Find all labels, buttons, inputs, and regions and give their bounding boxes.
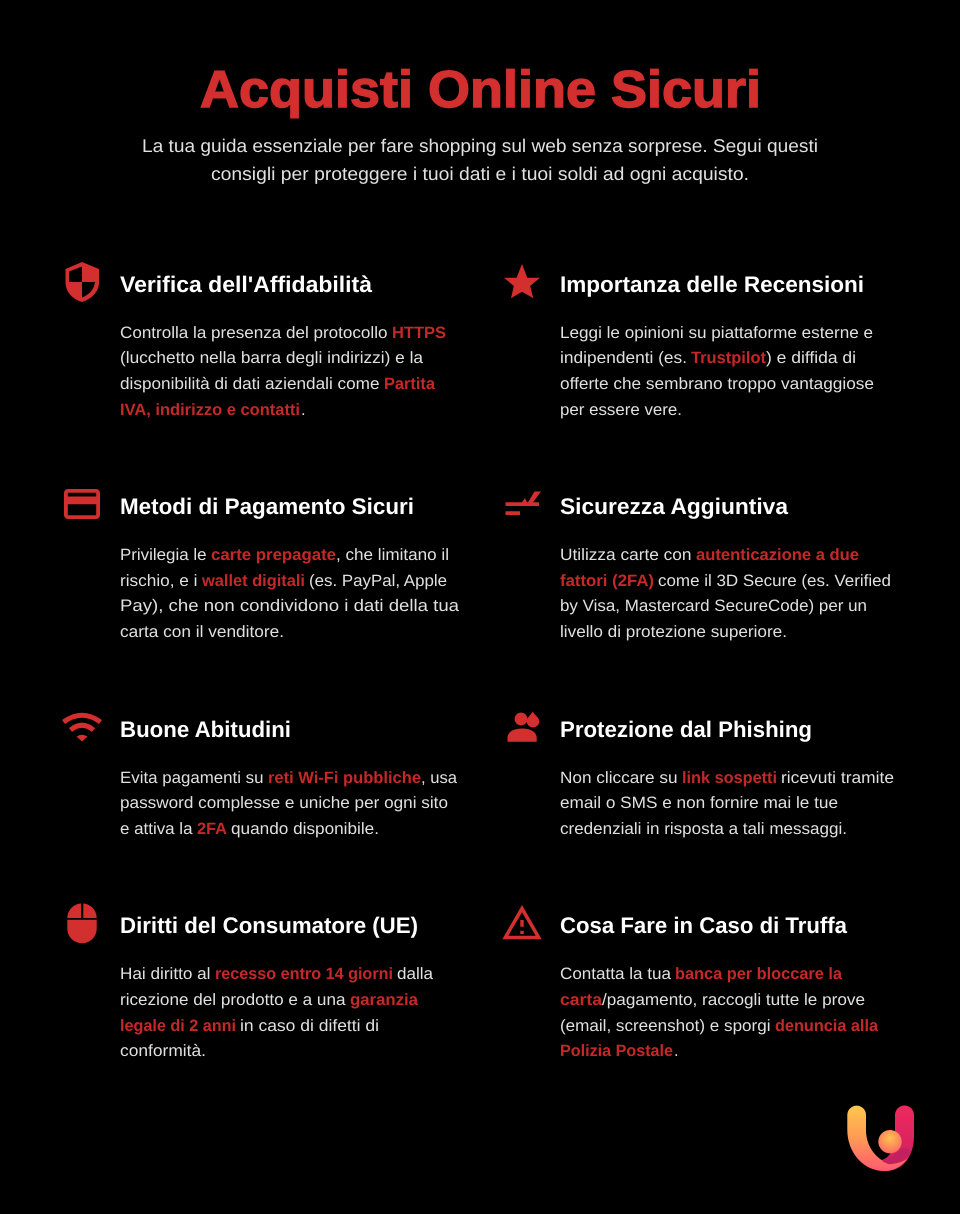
text block: credenziali in risposta a tali messaggi. xyxy=(560,820,847,838)
text block: /pagamento, raccogli tutte le prove xyxy=(602,991,865,1009)
text block: link sospetti xyxy=(682,769,777,787)
heading: Cosa Fare in Caso di Truffa xyxy=(560,913,847,938)
panel: sicurezza aggiuntiva xyxy=(506,492,891,641)
text block: ricevuti tramite xyxy=(781,769,894,787)
icon: star xyxy=(504,264,540,298)
text block: come il 3D Secure (es. Verified xyxy=(658,572,891,590)
text block: fattori (2FA) xyxy=(560,572,654,590)
text block: Leggi le opinioni su piattaforme esterne e xyxy=(560,324,873,342)
text block: Utilizza carte con xyxy=(560,546,692,564)
heading: Protezione dal Phishing xyxy=(560,717,812,742)
title: Acquisti Online Sicuri xyxy=(200,61,761,119)
text block: Polizia Postale xyxy=(560,1042,673,1060)
text block: banca per bloccare la xyxy=(675,965,843,983)
text block: Non cliccare su xyxy=(560,769,678,787)
text block: , usa xyxy=(421,769,458,787)
text block: password complesse e uniche per ogni sito xyxy=(120,794,448,812)
text block: denuncia alla xyxy=(775,1017,879,1035)
icon: check lines xyxy=(506,492,541,515)
text block xyxy=(120,324,446,419)
text block: ricezione del prodotto e a una xyxy=(120,991,346,1009)
icon: person with drop xyxy=(508,712,539,742)
text block xyxy=(120,546,460,641)
text block: (email, screenshot) e sporgi xyxy=(560,1017,770,1035)
heading: Importanza delle Recensioni xyxy=(560,272,864,297)
text block: recesso entro 14 giorni xyxy=(215,965,393,983)
text block: dalla xyxy=(397,965,434,983)
subtitle: consigli per proteggere i tuoi dati e i tuoi soldi ad ogni acquisto. xyxy=(211,163,749,184)
text block: legale di 2 anni xyxy=(120,1017,236,1035)
heading: Metodi di Pagamento Sicuri xyxy=(120,494,414,519)
subtitle xyxy=(142,135,818,184)
text block: per essere vere. xyxy=(560,401,682,419)
text block: carta con il venditore. xyxy=(120,623,284,641)
heading: Buone Abitudini xyxy=(120,717,291,742)
heading: Sicurezza Aggiuntiva xyxy=(560,494,788,519)
heading: Verifica dell'Affidabilità xyxy=(120,272,372,297)
text block: Evita pagamenti su xyxy=(120,769,264,787)
text block: ) e diffida di xyxy=(766,349,856,367)
text block: carta xyxy=(560,991,603,1009)
text block: carte prepagate xyxy=(211,546,336,564)
text block: offerte che sembrano troppo vantaggiose xyxy=(560,375,874,393)
text block: Contatta la tua xyxy=(560,965,672,983)
text block: indipendenti (es. xyxy=(560,349,687,367)
icon: shield xyxy=(66,262,99,302)
icon: mouse xyxy=(67,903,97,943)
panel: metodi di pagamento sicuri xyxy=(64,489,460,641)
text block xyxy=(560,769,894,838)
text block xyxy=(120,965,434,1060)
text block: IVA, indirizzo e contatti xyxy=(120,401,300,419)
text block: e attiva la xyxy=(120,820,193,838)
text block: reti Wi-Fi pubbliche xyxy=(268,769,421,787)
text block xyxy=(560,965,879,1060)
text block: garanzia xyxy=(350,991,419,1009)
subtitle: La tua guida essenziale per fare shopping sul web senza sorprese. Segui questi xyxy=(142,135,818,156)
heading: Diritti del Consumatore (UE) xyxy=(120,913,418,938)
panel: diritti del consumatore xyxy=(67,903,434,1060)
panel: importanza delle recensioni xyxy=(504,264,874,419)
text block: (es. PayPal, Apple xyxy=(309,572,447,590)
text block: quando disponibile. xyxy=(231,820,379,838)
icon: wifi xyxy=(64,715,100,742)
text block: Trustpilot xyxy=(691,349,767,367)
text block: Pay), che non condividono i dati della tua xyxy=(120,596,460,615)
text block: by Visa, Mastercard SecureCode) per un xyxy=(560,597,867,615)
text block: rischio, e i xyxy=(120,572,198,590)
text block xyxy=(120,769,458,838)
text block xyxy=(560,546,891,641)
icon: credit card xyxy=(64,489,100,519)
text block: conformità. xyxy=(120,1042,206,1060)
panel: cosa fare in caso di truffa xyxy=(502,905,879,1060)
panel: protezione dal phishing xyxy=(508,712,894,838)
text block: , che limitano il xyxy=(336,546,449,564)
text block: autenticazione a due xyxy=(696,546,859,564)
text block: in caso di difetti di xyxy=(240,1017,379,1035)
text block: disponibilità di dati aziendali come xyxy=(120,375,380,393)
text block: (lucchetto nella barra degli indirizzi) e la xyxy=(120,349,424,367)
text block: livello di protezione superiore. xyxy=(560,623,787,641)
icon: warning triangle xyxy=(502,905,542,939)
text block: Partita xyxy=(384,375,436,393)
panel: buone abitudini xyxy=(64,715,458,838)
text block: HTTPS xyxy=(392,324,446,342)
logo xyxy=(847,1106,914,1171)
text block: 2FA xyxy=(197,820,227,838)
text block: wallet digitali xyxy=(201,572,305,590)
text block: Privilegia le xyxy=(120,546,206,564)
text block: Hai diritto al xyxy=(120,965,210,983)
text block: . xyxy=(674,1042,679,1060)
panel: verifica dell'affidabilità xyxy=(66,262,446,419)
text block xyxy=(560,324,874,419)
text block: email o SMS e non fornire mai le tue xyxy=(560,794,838,812)
text block: Controlla la presenza del protocollo xyxy=(120,324,388,342)
text block: . xyxy=(301,401,306,419)
